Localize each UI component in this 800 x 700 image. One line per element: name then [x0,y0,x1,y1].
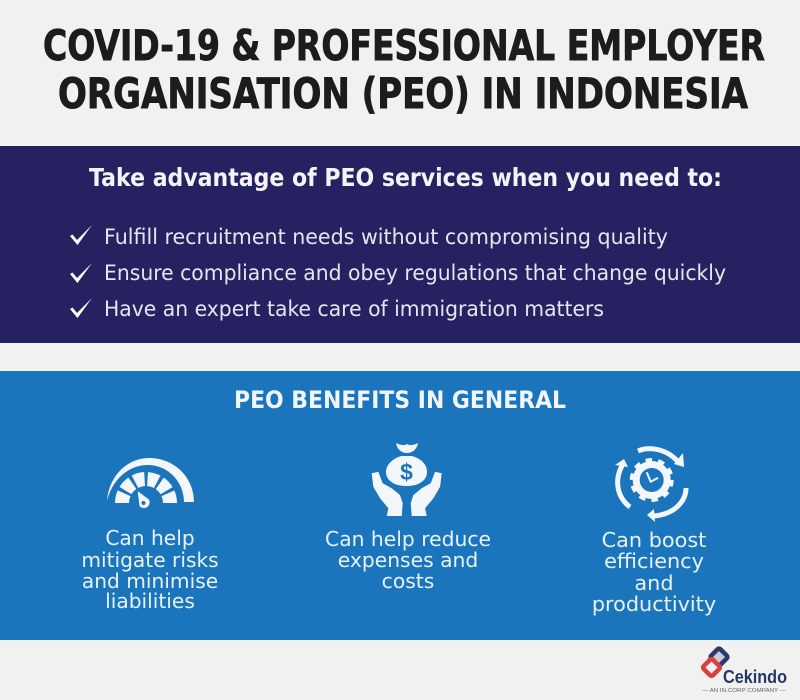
logo: Cekindo: — AN IN.CORP COMPANY — [702,688,786,694]
benefits heading: PEO BENEFITS IN GENERAL [234,386,566,414]
logo: Cekindo [702,648,787,694]
caption: expenses: costs [382,569,434,593]
item: immigration: Have an expert take care of immigration matters [104,297,604,322]
panel: PEO benefits [0,371,800,640]
logo: Cekindo: Cekindo [723,667,787,687]
caption: risks [81,526,219,613]
icon: money bag in hands: $ [400,459,413,485]
caption: efficiency: efficiency [604,549,704,573]
panel: PEO services [0,146,800,343]
title [43,21,765,118]
caption: expenses [325,527,491,593]
caption: expenses: expenses and [338,548,478,572]
caption: efficiency: Can boost [602,528,706,552]
caption: expenses: Can help reduce [325,527,491,551]
caption: efficiency [592,528,716,616]
item: compliance: Ensure compliance and obey regulations that change quickly [104,261,726,286]
icon: speedometer [107,458,194,509]
item: recruitment: Fulfill recruitment needs without compromising quality [104,225,668,250]
caption: efficiency: productivity [592,592,716,616]
caption: efficiency: and [634,571,674,595]
caption: risks: Can help [105,526,195,550]
services heading: Take advantage of PEO services when you need to: [89,163,722,192]
caption: risks: and minimise [82,569,218,593]
caption: risks: mitigate risks [81,548,219,572]
icon: gear and cycle arrows [615,449,686,522]
icon: money bag in hands [372,443,442,516]
caption: risks: liabilities [105,589,195,613]
checklist [70,225,726,322]
